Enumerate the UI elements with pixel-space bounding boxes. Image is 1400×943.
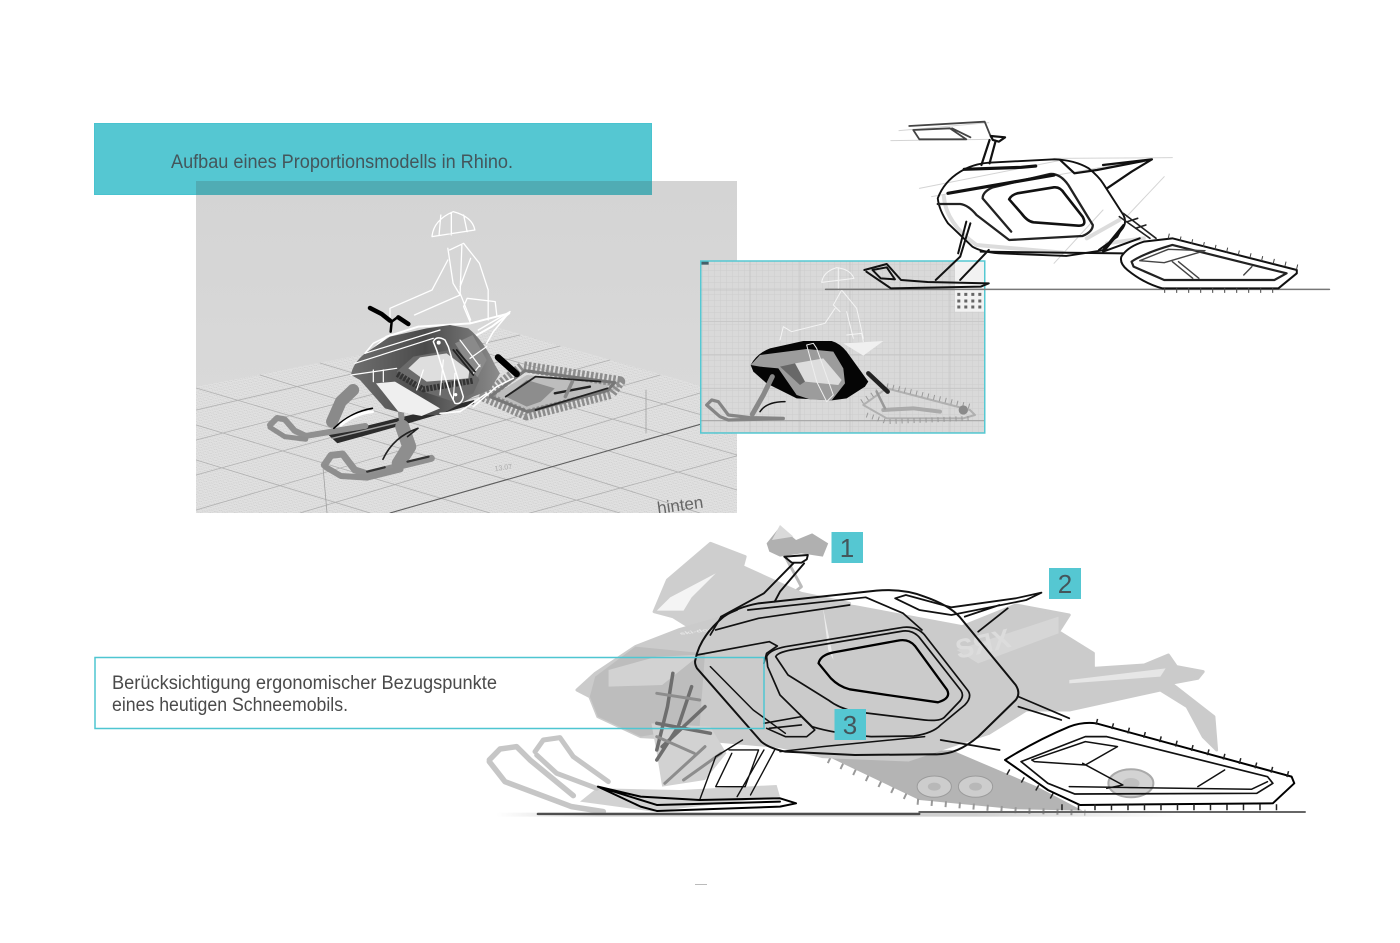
title panel — [94, 124, 652, 195]
handlebar mass — [767, 527, 828, 557]
sketch body — [938, 159, 1125, 256]
window frame — [767, 627, 970, 737]
text box: ergonomic reference points — [95, 658, 764, 728]
marker 1: 1 — [840, 533, 854, 563]
toolbar — [955, 260, 984, 312]
perspective floor grid — [195, 328, 740, 513]
text box: ergonomic reference points: Berücksichtigung ergonomischer Bezugspunkte — [112, 673, 497, 694]
sketch construction haze — [891, 123, 1172, 263]
sketch ski — [864, 264, 989, 288]
marker 1 — [832, 532, 863, 563]
handlebar — [721, 555, 808, 617]
sketch spoiler and struts — [1060, 159, 1152, 188]
window — [819, 640, 948, 702]
rear link — [941, 697, 1069, 750]
panel: Rhino side view viewport — [700, 255, 990, 440]
dimension label: 13.07 — [494, 464, 513, 473]
front skis — [270, 390, 474, 478]
overlay sketch: bottom — [538, 555, 1305, 814]
handlebar and shock absorber — [370, 308, 517, 374]
marker 3 — [834, 709, 866, 740]
ground line — [538, 813, 919, 815]
XRS lettering: ЅЯX — [953, 623, 1013, 665]
sketch handlebar — [909, 122, 991, 139]
windshield and body — [654, 543, 850, 630]
rider wireframe — [365, 212, 509, 357]
air intake — [764, 717, 815, 737]
rear track in perspective — [485, 367, 620, 415]
track — [863, 388, 975, 418]
ground line — [826, 288, 1329, 290]
front suspension — [651, 723, 726, 787]
sketch track — [1121, 238, 1297, 288]
model lettering: ski-doo — [678, 627, 716, 636]
body outline — [695, 590, 1018, 755]
sled shell — [843, 341, 883, 356]
faint page mark — [695, 884, 707, 885]
track and wheels — [828, 750, 1083, 811]
sled body wireframe — [351, 312, 513, 416]
ground shadow — [496, 813, 1182, 817]
roof lines — [697, 597, 922, 663]
track outline — [1005, 723, 1294, 805]
track teeth — [1008, 722, 1297, 807]
ski and strut — [707, 400, 783, 420]
seat and spoiler — [895, 593, 1041, 632]
skis of the reference photo — [489, 738, 780, 812]
panel: Rhino perspective viewport — [195, 181, 740, 518]
marker 2: 2 — [1058, 569, 1072, 599]
rider outline — [780, 268, 863, 342]
shock absorber — [868, 373, 888, 392]
concept sketch: top right — [826, 122, 1329, 290]
reference snowmobile photo, greyed — [496, 525, 1217, 817]
text box: ergonomic reference points: eines heutigen Schneemobils. — [112, 695, 348, 716]
view label: hinten: hinten — [656, 493, 704, 518]
title text: Aufbau eines Proportionsmodells in Rhino. — [171, 152, 513, 173]
marker 3: 3 — [843, 710, 857, 740]
marker 2 — [1049, 568, 1081, 599]
front strut and ski — [700, 740, 775, 800]
